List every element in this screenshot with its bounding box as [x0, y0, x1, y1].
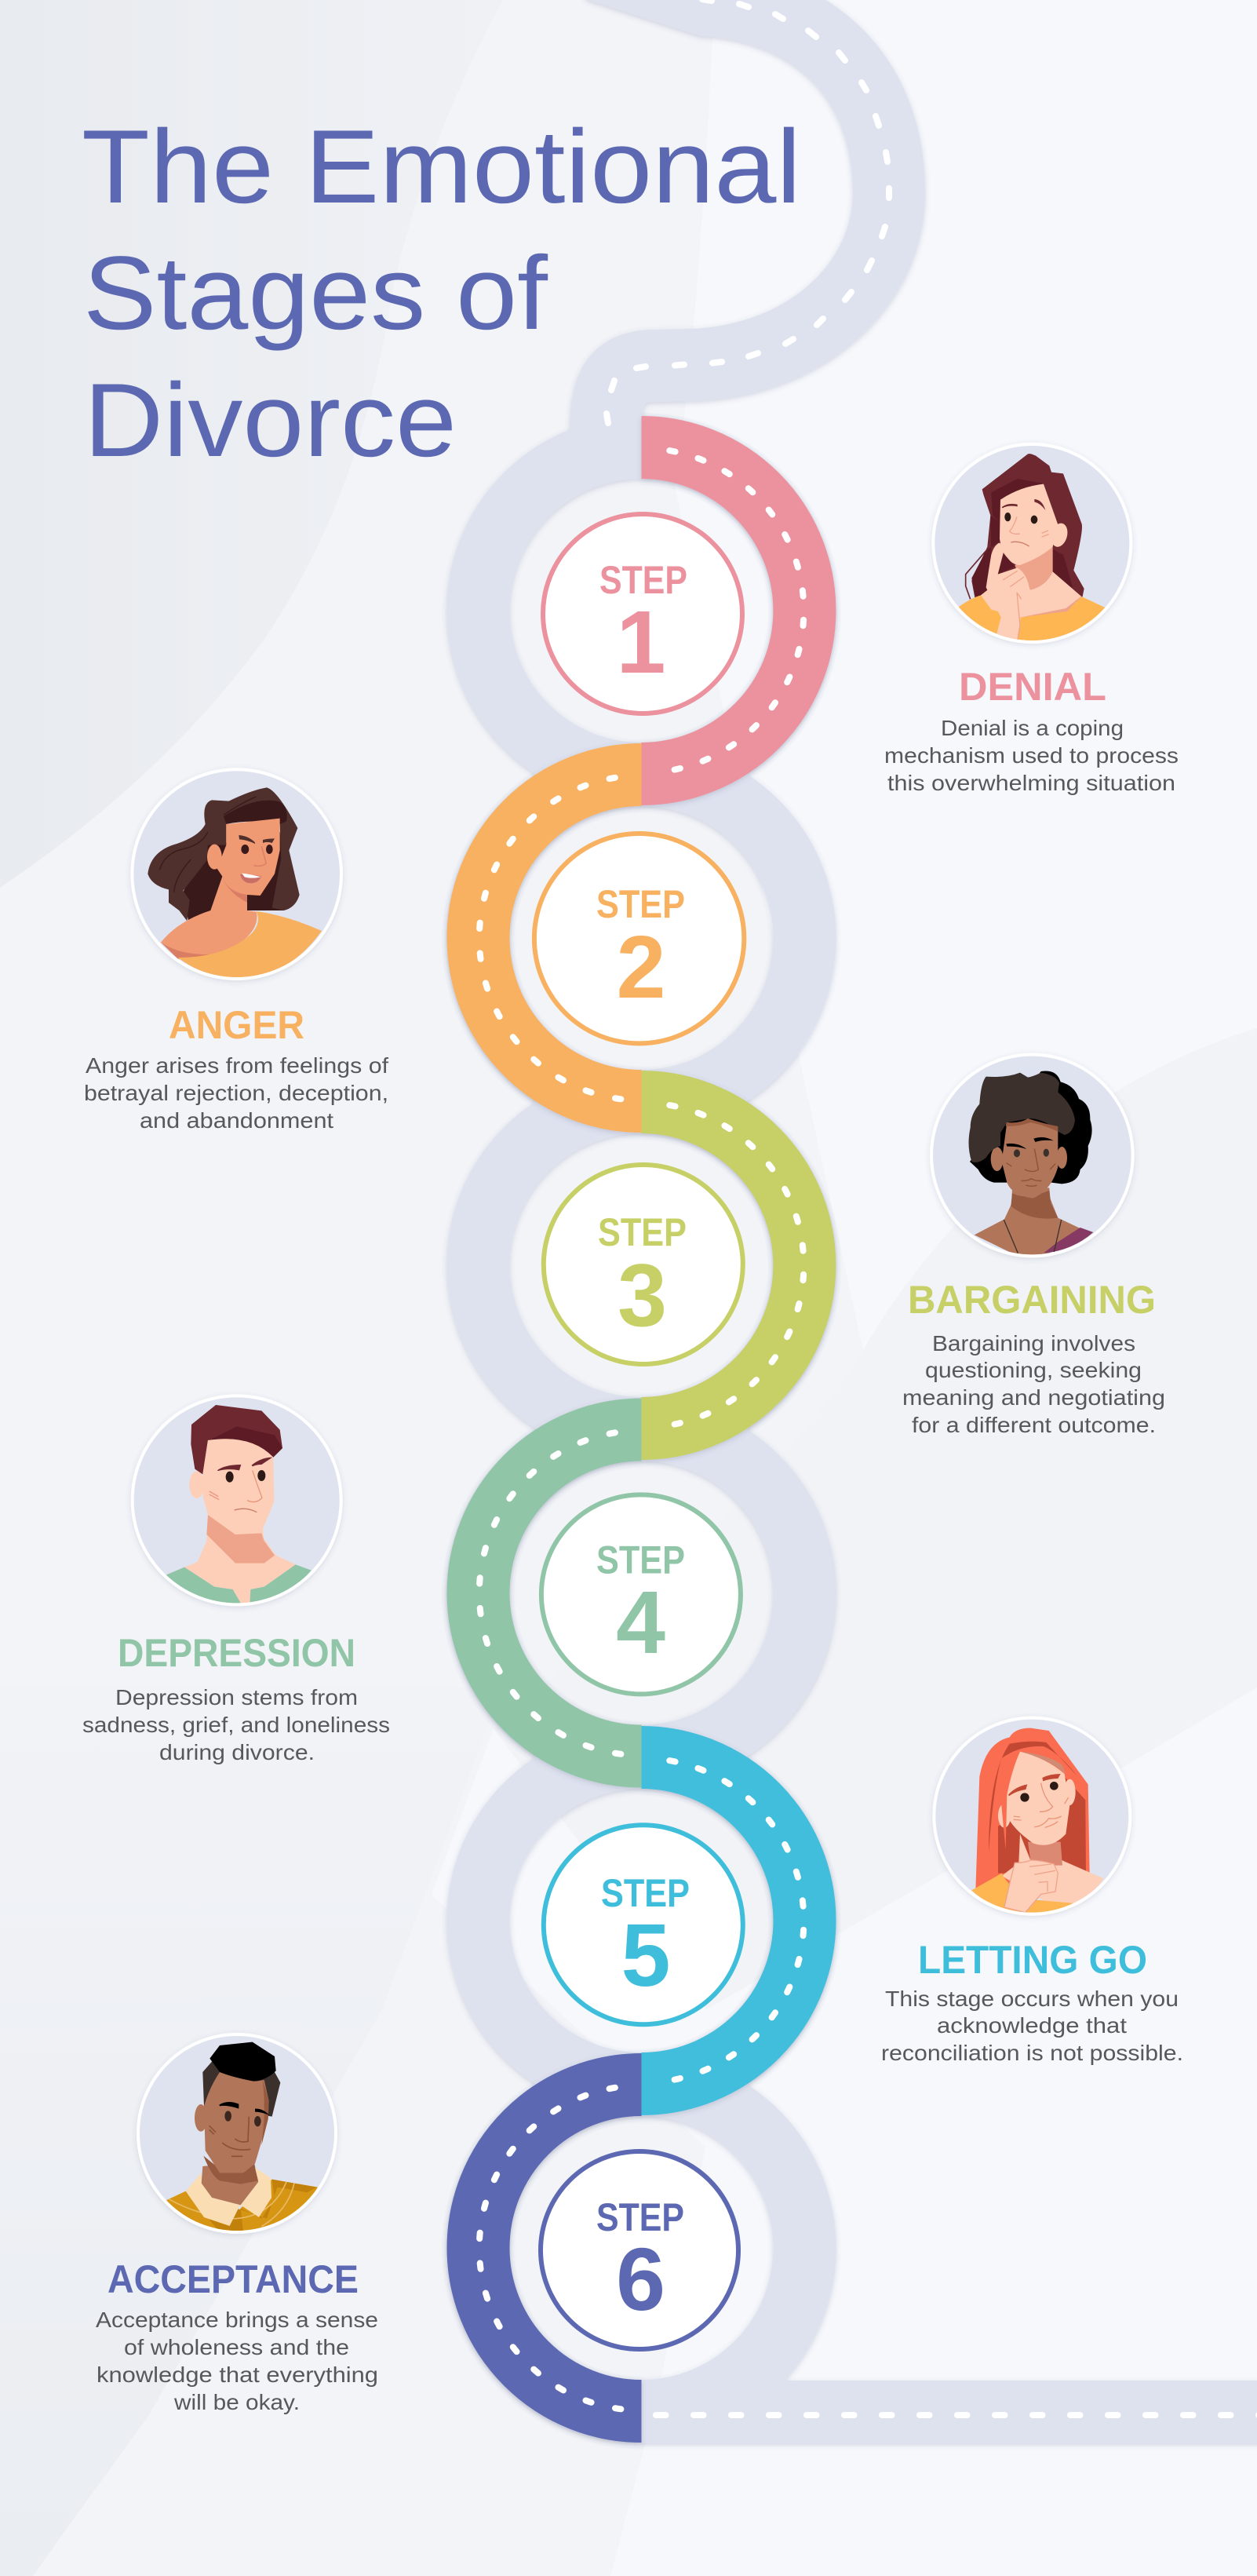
- road segment: step 2: [479, 775, 642, 1101]
- avatar: depression man: [133, 1396, 341, 1605]
- title: [82, 109, 801, 479]
- title: Divorce: [84, 363, 457, 479]
- title: The Emotional: [82, 109, 801, 225]
- panel: acceptance: [96, 2034, 378, 2414]
- description: letting go: [881, 1987, 1183, 2065]
- panel: letting go: [881, 1718, 1183, 2065]
- step 1 badge: [543, 514, 742, 713]
- road segment: step 6: [479, 2085, 642, 2411]
- bottom road dashes: [656, 2412, 1257, 2418]
- step 2 badge: 2: [617, 918, 665, 1016]
- step 4 badge: [541, 1494, 741, 1694]
- description: depression: Depression stems from: [115, 1685, 358, 1709]
- description: anger: [84, 1053, 388, 1133]
- description: depression: [82, 1685, 390, 1764]
- description: bargaining: Bargaining involves: [932, 1331, 1135, 1356]
- step 5 badge: 5: [621, 1906, 670, 2005]
- avatar: denial woman: [933, 444, 1131, 644]
- description: depression: during divorce.: [159, 1740, 315, 1764]
- step 6 badge: [541, 2151, 738, 2349]
- description: denial: this overwhelming situation: [887, 771, 1175, 795]
- description: anger: betrayal rejection, deception,: [84, 1081, 388, 1105]
- heading: denial: DENIAL: [959, 665, 1106, 709]
- description: bargaining: meaning and negotiating: [902, 1385, 1165, 1410]
- description: acceptance: of wholeness and the: [124, 2335, 349, 2359]
- step 3 badge: [544, 1165, 743, 1364]
- step 1 badge: 1: [617, 593, 665, 691]
- description: letting go: reconciliation is not possible.: [881, 2041, 1183, 2065]
- avatar: anger woman: [132, 769, 341, 979]
- avatar: acceptance man: [138, 2034, 336, 2233]
- step 5 badge: STEP: [601, 1871, 690, 1915]
- top road dashes: [607, 0, 889, 423]
- heading: bargaining: BARGAINING: [908, 1278, 1156, 1322]
- description: anger: Anger arises from feelings of: [86, 1053, 388, 1078]
- step 5 badge: [544, 1825, 743, 2024]
- heading: acceptance: ACCEPTANCE: [107, 2257, 359, 2301]
- heading: anger: ANGER: [169, 1003, 304, 1047]
- description: depression: sadness, grief, and loneliness: [82, 1713, 390, 1737]
- step 6 badge: STEP: [596, 2195, 684, 2239]
- avatar: letting go woman: [934, 1718, 1130, 1914]
- description: anger: and abandonment: [140, 1108, 333, 1133]
- description: denial: Denial is a coping: [941, 716, 1124, 740]
- panel: denial: [884, 444, 1179, 795]
- heading: letting go: LETTING GO: [918, 1938, 1147, 1982]
- avatar: bargaining person: [931, 1055, 1133, 1256]
- step 1 badge: STEP: [599, 558, 687, 602]
- step 2 badge: STEP: [596, 882, 685, 926]
- road segment: step 3: [642, 1102, 804, 1428]
- description: acceptance: knowledge that everything: [97, 2363, 378, 2387]
- step 4 badge: 4: [616, 1573, 665, 1672]
- step 3 badge: STEP: [598, 1210, 687, 1254]
- title: Stages of: [83, 235, 548, 352]
- description: bargaining: for a different outcome.: [912, 1413, 1156, 1437]
- description: bargaining: questioning, seeking: [925, 1358, 1142, 1382]
- description: acceptance: [96, 2308, 378, 2414]
- road segment: step 1: [642, 447, 804, 774]
- description: letting go: acknowledge that: [937, 2013, 1127, 2038]
- road segment: step 4: [479, 1430, 642, 1757]
- description: acceptance: will be okay.: [173, 2390, 300, 2414]
- panel: depression: [82, 1396, 390, 1764]
- description: letting go: This stage occurs when you: [885, 1987, 1179, 2011]
- grey road and rings: [479, 0, 1257, 2412]
- step 6 badge: 6: [616, 2230, 665, 2329]
- road dashes on coloured segments: [479, 451, 803, 2409]
- panel: anger: [84, 769, 388, 1133]
- step 3 badge: 3: [618, 1246, 667, 1345]
- step 2 badge: [534, 834, 744, 1043]
- description: acceptance: Acceptance brings a sense: [96, 2308, 378, 2332]
- description: bargaining: [902, 1331, 1165, 1437]
- description: denial: [884, 716, 1179, 795]
- description: denial: mechanism used to process: [884, 743, 1179, 768]
- heading: depression: DEPRESSION: [118, 1631, 355, 1675]
- step 4 badge: STEP: [596, 1538, 685, 1582]
- panel: bargaining: [902, 1055, 1165, 1437]
- road segment: step 5: [642, 1757, 805, 2084]
- coloured road segments: [479, 447, 805, 2411]
